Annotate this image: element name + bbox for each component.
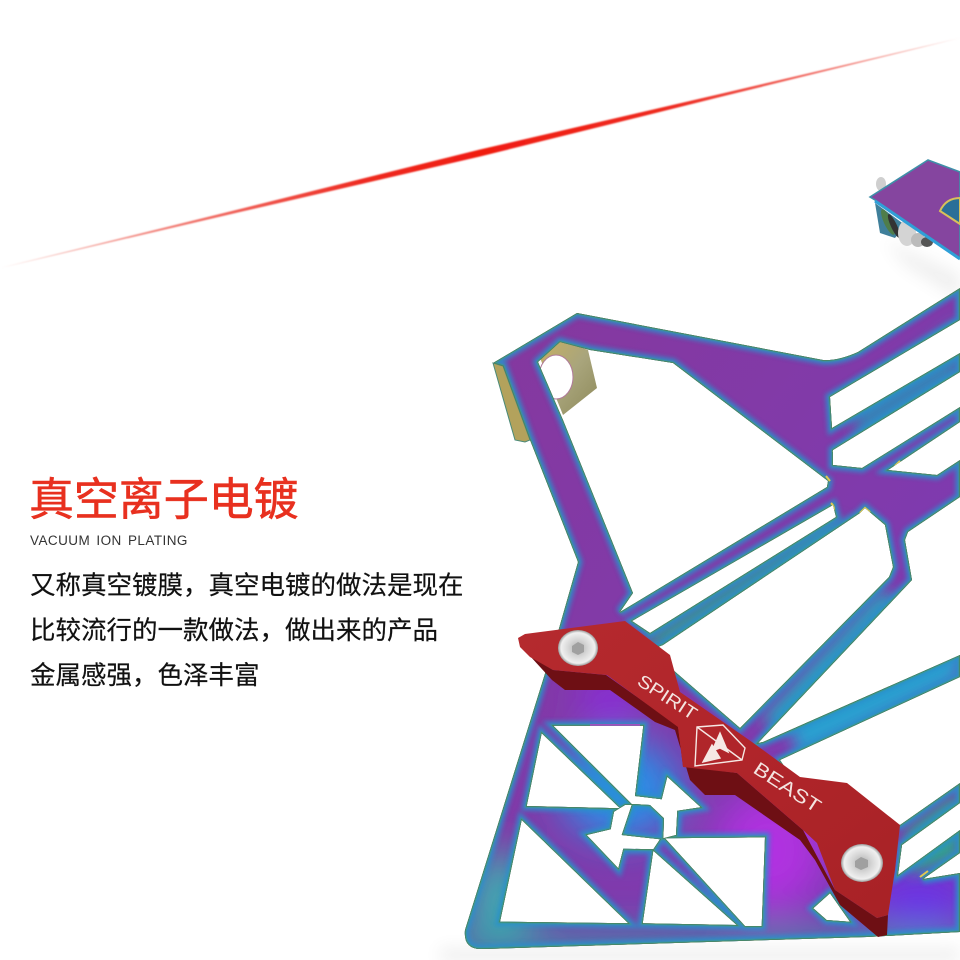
logo bracket bbox=[518, 621, 900, 937]
bolt right bbox=[841, 844, 883, 882]
bracket top face bbox=[518, 621, 900, 918]
front bent tab side bbox=[493, 363, 530, 442]
description text: 金属感强，色泽丰富 bbox=[30, 662, 260, 690]
soft floor shadows bbox=[440, 240, 960, 960]
edge sheen bbox=[465, 288, 960, 949]
english subtitle: VACUUM ION PLATING bbox=[30, 533, 188, 548]
rear bent tab with hole bbox=[538, 340, 597, 415]
yellow edge glints bbox=[590, 449, 928, 877]
description text: 比较流行的一款做法，做出来的产品 bbox=[30, 617, 438, 645]
hinge plate bbox=[870, 160, 960, 258]
bracket side face bbox=[530, 656, 888, 937]
spring washers bbox=[875, 177, 933, 247]
colour washes bbox=[440, 675, 960, 960]
description text: 又称真空镀膜，真空电镀的做法是现在 bbox=[30, 572, 464, 600]
engraved SPIRIT: SPIRIT bbox=[634, 671, 701, 724]
hinge slot bbox=[940, 198, 960, 224]
engraved BEAST: BEAST bbox=[749, 759, 825, 818]
description text bbox=[30, 572, 464, 690]
iridescent plate bbox=[440, 280, 960, 960]
title: 真空离子电镀 bbox=[29, 474, 298, 525]
engraved logo mark bbox=[695, 725, 745, 766]
hinge hardware top right bbox=[870, 160, 960, 259]
red laser line bbox=[0, 38, 960, 268]
bolt left bbox=[558, 630, 598, 666]
